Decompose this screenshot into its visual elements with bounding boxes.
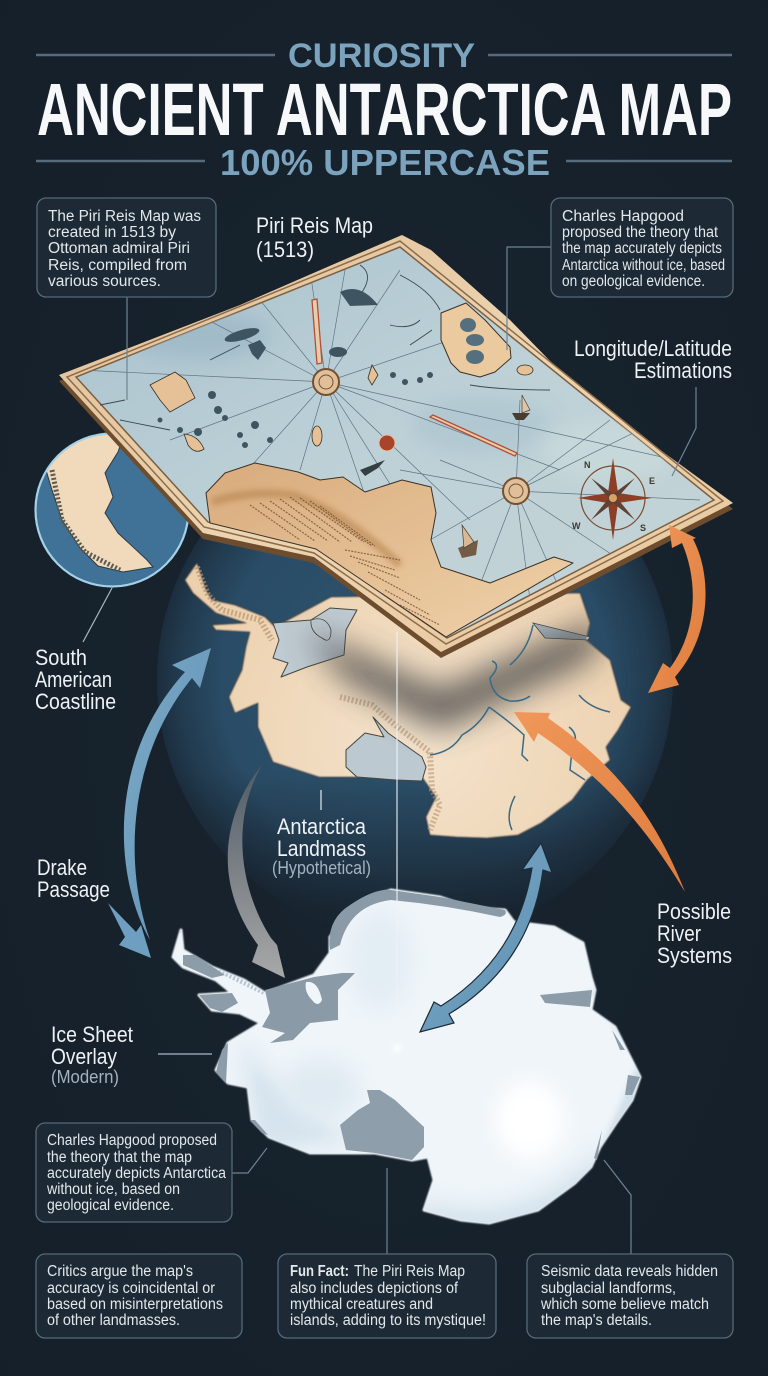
kicker: curiosity: CURIOSITY <box>288 37 475 75</box>
compass rose 2 <box>503 478 529 504</box>
callout: hapgood lower: Charles Hapgood proposed <box>47 1132 217 1149</box>
sea mottling <box>80 270 720 600</box>
west shelf <box>216 1043 268 1135</box>
map land south <box>206 463 573 637</box>
callout: hapgood top: on geological evidence. <box>562 273 705 290</box>
scale bar north <box>312 299 322 364</box>
callout: hapgood top: proposed the theory that <box>562 224 719 241</box>
label: possible river systems: River <box>657 921 701 946</box>
callout: critics: of other landmasses. <box>47 1312 180 1329</box>
callout: fun fact: mythical creatures and <box>290 1296 433 1313</box>
weddell shelf <box>262 973 355 1043</box>
callout: fun fact <box>278 1254 496 1338</box>
east shelf <box>540 990 592 1007</box>
label: piri reis map: (1513) <box>256 237 314 262</box>
callout: seismic data: Seismic data reveals hidden <box>541 1263 718 1280</box>
callout: fun fact: The Piri Reis Map <box>354 1263 465 1280</box>
leader lines <box>83 247 696 1254</box>
ship center <box>360 460 385 476</box>
arrow: drake passage <box>108 903 151 958</box>
compass star <box>572 458 655 540</box>
small dark islands <box>158 289 433 448</box>
label: drake passage <box>37 855 110 902</box>
callout: hapgood lower: accurately depicts Antarctica <box>47 1165 226 1182</box>
callout: piri reis origin: Reis, compiled from <box>48 257 187 274</box>
land <box>185 563 631 838</box>
arrow: orange river <box>514 712 685 892</box>
callout: fun fact: Fun Fact: <box>290 1263 349 1280</box>
ship north <box>512 395 530 420</box>
callout: piri reis origin: created in 1513 by <box>48 224 176 241</box>
map paper edge <box>59 241 733 658</box>
callout: hapgood top: Antarctica without ice, based <box>562 257 725 274</box>
label: south american coastline: Coastline <box>35 689 116 714</box>
compass star: S <box>640 523 646 533</box>
subtitle: 100% UPPERCASE <box>220 142 550 183</box>
map land north east <box>441 303 511 377</box>
mountain ridge <box>340 697 440 830</box>
callout: hapgood lower: the theory that the map <box>47 1149 192 1166</box>
peninsula ridge <box>197 567 272 640</box>
map sea <box>76 247 714 638</box>
callout: critics <box>36 1254 242 1338</box>
compass star: E <box>649 476 655 486</box>
label: ice sheet overlay: Ice Sheet <box>51 1022 133 1047</box>
callout: piri reis origin <box>37 198 216 297</box>
map shadow on land <box>305 615 610 730</box>
compass star: W <box>572 521 581 531</box>
island cluster <box>150 365 533 451</box>
header <box>36 37 732 183</box>
compass star: N <box>584 460 590 470</box>
scale bar south <box>430 415 517 456</box>
map paper <box>59 235 733 652</box>
ridge <box>212 494 400 565</box>
label: south american coastline <box>35 645 116 714</box>
lakes <box>460 318 484 364</box>
top margin <box>329 890 506 950</box>
label: longitude latitude <box>574 336 732 383</box>
compass rose 1 <box>313 369 339 395</box>
coastline land <box>46 434 154 572</box>
rhumb lines <box>80 270 720 600</box>
ocean halo <box>157 536 673 902</box>
label: ice sheet overlay <box>51 1022 133 1087</box>
east shelf <box>533 623 590 640</box>
callout: critics: based on misinterpretations <box>47 1296 223 1313</box>
ross shelf <box>340 1090 424 1160</box>
arrow: grey <box>228 765 285 978</box>
callout: hapgood lower: without ice, based on <box>46 1181 180 1198</box>
callout: seismic data: subglacial landforms, <box>541 1280 676 1297</box>
callout: hapgood lower <box>36 1123 232 1222</box>
callout: critics: accuracy is coincidental or <box>47 1280 215 1297</box>
label: antarctica landmass: Antarctica <box>277 814 367 839</box>
south american coastline inset <box>30 432 189 587</box>
label: antarctica landmass: (Hypothetical) <box>272 858 371 878</box>
weddell shelf <box>273 608 357 677</box>
callout: piri reis origin: various sources. <box>48 273 161 290</box>
label: south american coastline: South <box>35 645 87 670</box>
callout: piri reis origin: The Piri Reis Map was <box>48 208 201 225</box>
red medallion <box>379 435 395 451</box>
label: longitude latitude: Longitude/Latitude <box>574 336 732 361</box>
label: drake passage: Passage <box>37 877 110 902</box>
callout: hapgood top: Charles Hapgood <box>562 208 684 225</box>
callout: fun fact: islands, adding to its mystique! <box>290 1312 486 1329</box>
arrow: blue double headed <box>420 843 552 1032</box>
label: possible river systems <box>657 899 732 968</box>
ice sheet overlay <box>173 890 660 1240</box>
label: ice sheet overlay: (Modern) <box>51 1067 119 1087</box>
label: south american coastline: American <box>35 667 112 692</box>
label: piri reis map: Piri Reis Map <box>256 213 373 238</box>
arrow: orange double headed <box>648 525 706 693</box>
callout: critics: Critics argue the map's <box>47 1263 193 1280</box>
callout: seismic data <box>527 1254 733 1338</box>
pointer line: center pole <box>393 632 401 1052</box>
callout: hapgood top: the map accurately depicts <box>562 240 722 257</box>
rivers <box>430 625 610 830</box>
arrow: blue long <box>124 648 211 940</box>
label: longitude latitude: Estimations <box>634 358 732 383</box>
callout: seismic data: which some believe match <box>540 1296 709 1313</box>
callout: hapgood lower: geological evidence. <box>47 1197 174 1214</box>
label: ice sheet overlay: Overlay <box>51 1044 117 1069</box>
coast outlines <box>100 265 550 430</box>
label: drake passage: Drake <box>37 855 87 880</box>
label: antarctica landmass: Landmass <box>277 836 366 861</box>
ship south <box>458 525 478 558</box>
ross shelf <box>346 717 426 781</box>
label: piri reis map <box>256 213 373 262</box>
callout: fun fact: also includes depictions of <box>290 1280 459 1297</box>
inscription <box>250 497 440 625</box>
callout: piri reis origin: Ottoman admiral Piri <box>48 240 190 257</box>
right margin <box>594 1030 640 1160</box>
ice body <box>173 890 640 1223</box>
piri reis map <box>59 235 733 658</box>
callout: seismic data: the map's details. <box>541 1312 652 1329</box>
label: possible river systems: Systems <box>657 943 732 968</box>
callout: hapgood top <box>551 198 733 297</box>
label: possible river systems: Possible <box>657 899 731 924</box>
hypothetical antarctica landmass <box>157 536 673 902</box>
label: antarctica landmass <box>272 814 371 878</box>
peninsula shelf <box>183 955 238 1012</box>
